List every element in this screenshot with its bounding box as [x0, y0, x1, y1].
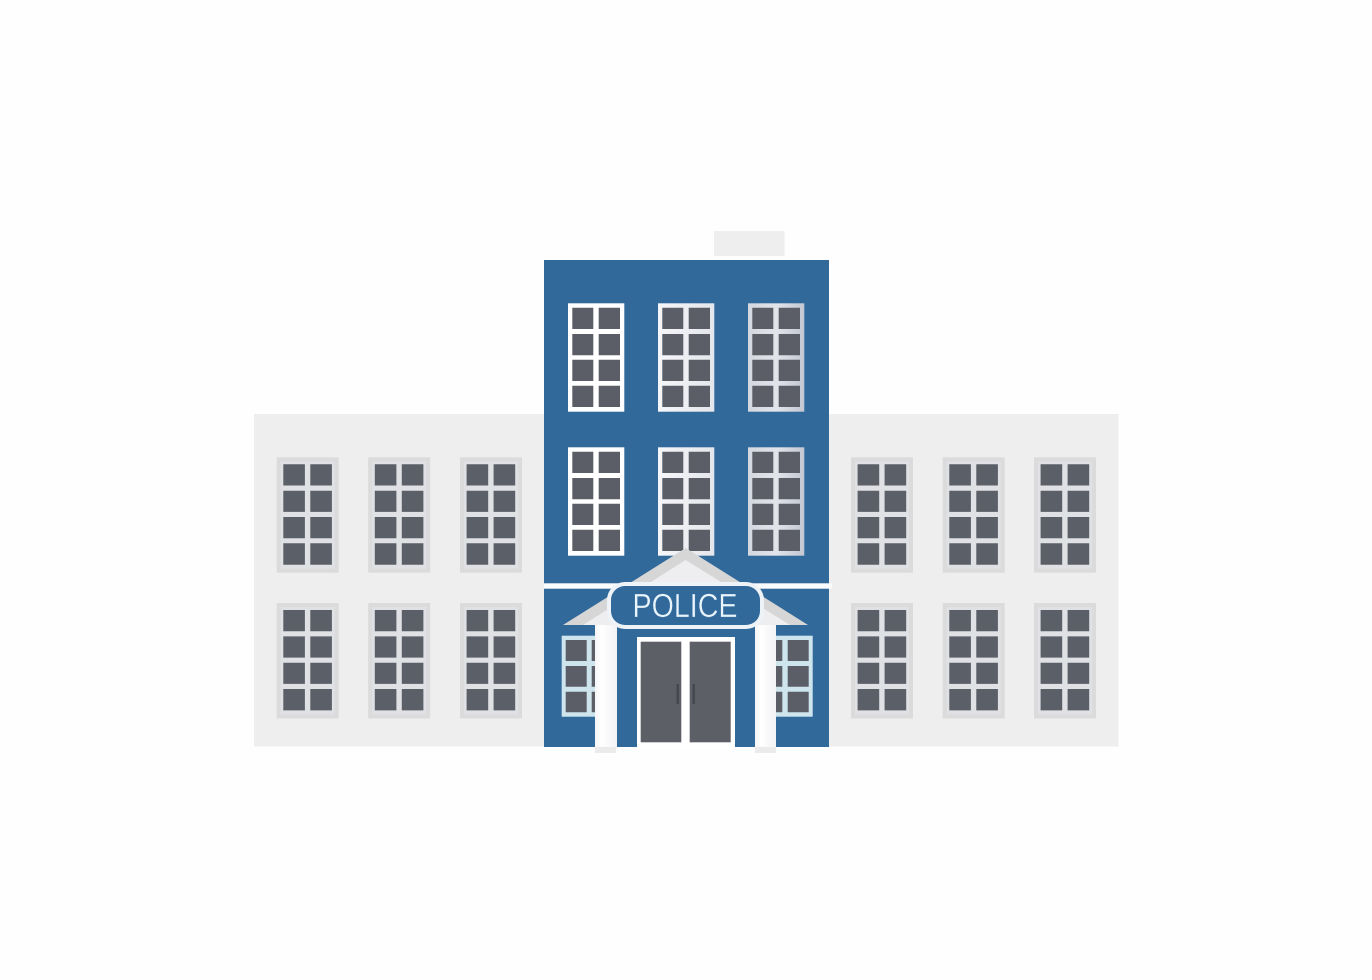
window: tower top left: [568, 303, 624, 412]
window: tower top middle: [658, 303, 714, 412]
central blue tower: [544, 260, 829, 747]
portico roof: [563, 548, 808, 625]
right wing: [829, 414, 1118, 746]
window: left wing upper 2: [368, 457, 430, 573]
entrance doors: [637, 637, 735, 750]
floor divider band: [544, 583, 832, 589]
window: right wing lower 2: [943, 603, 1005, 718]
window: right wing upper 1: [851, 457, 913, 573]
window: tower second middle: [658, 447, 714, 556]
police sign: [607, 582, 764, 629]
window: left wing lower 2: [368, 603, 430, 718]
window: tower second left: [568, 447, 624, 556]
window: ground floor left: [562, 636, 598, 717]
window: ground floor right: [774, 636, 813, 717]
chimney: [714, 231, 784, 256]
window: right wing upper 3: [1034, 457, 1096, 573]
window: right wing lower 3: [1034, 603, 1096, 718]
window: left wing lower 1: [277, 603, 339, 718]
sign text: POLICE: [632, 587, 738, 624]
right column: [755, 625, 776, 753]
left door: [641, 642, 681, 742]
window: left wing lower 3: [460, 603, 522, 718]
right door: [690, 642, 731, 742]
left wing: [254, 414, 544, 746]
door handles: [676, 684, 695, 704]
window: right wing upper 2: [943, 457, 1005, 573]
window: right wing lower 1: [851, 603, 913, 718]
window: tower top right: [748, 303, 804, 412]
window: left wing upper 3: [460, 457, 522, 573]
left column: [595, 625, 617, 753]
window: left wing upper 1: [277, 457, 339, 573]
window: tower second right: [748, 447, 804, 556]
